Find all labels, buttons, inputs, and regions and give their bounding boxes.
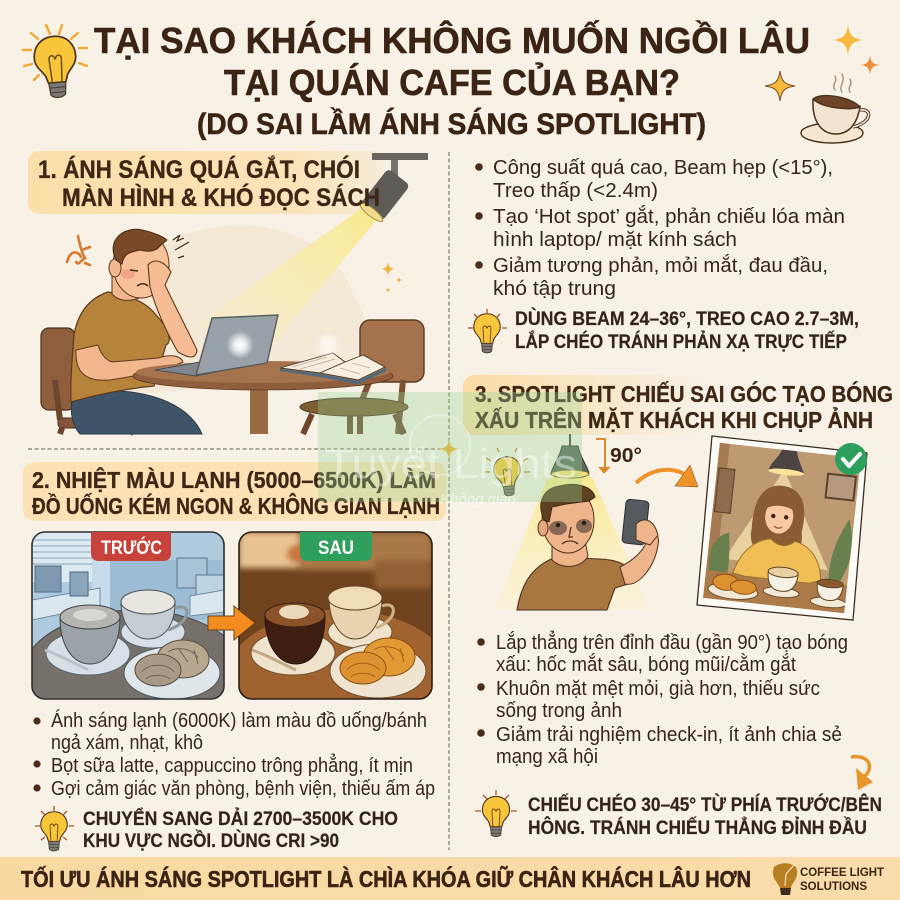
bullets: section 3: Giảm trải nghiệm check-in, ít ảnh chia sẻ (496, 724, 842, 746)
bullets: section 3: Lắp thẳng trên đỉnh đầu (gần 90°) tạo bóng (496, 630, 848, 654)
before picture: cold light (31, 531, 225, 700)
angle mark 90 degrees (596, 439, 642, 473)
right chair (300, 320, 424, 434)
heading pill 3: XẤU TRÊN MẶT KHÁCH KHI CHỤP ẢNH (475, 405, 873, 433)
bullets: section 3 (477, 630, 848, 768)
bullets: section 1 (475, 157, 845, 300)
heading pill 2 (23, 462, 446, 521)
light cone (495, 477, 650, 610)
watermark (318, 392, 582, 508)
icon: pendant lamp (551, 434, 589, 478)
heading pill 3 (463, 375, 893, 435)
sparkle on divider (439, 439, 459, 459)
bullets: section 2: Gợi cảm giác văn phòng, bệnh viện, thiếu ấm áp (51, 778, 435, 800)
sparkles (381, 262, 402, 293)
tip: section 3 (475, 790, 882, 839)
tip: section 2: CHUYỂN SANG DẢI 2700–3500K CHO (83, 808, 398, 830)
left chair (41, 328, 138, 434)
divider: horizontal (28, 448, 448, 450)
icon: coffee cup (801, 74, 869, 143)
title: (DO SAI LẦM ÁNH SÁNG SPOTLIGHT) (197, 107, 706, 141)
bullets: section 3: xấu: hốc mắt sâu, bóng mũi/cằm gắt (496, 653, 796, 676)
arrow: before to after (208, 606, 255, 640)
bullets: section 3: sống trong ảnh (496, 700, 622, 722)
panel: section 3 (463, 375, 893, 839)
laptop with glare (155, 315, 278, 376)
badge: after: SAU (318, 538, 354, 559)
tip: section 3: HÔNG. TRÁNH CHIẾU THẲNG ĐỈNH ĐẦU (528, 817, 867, 839)
divider: vertical (448, 152, 450, 850)
icon: pain squiggle (67, 236, 90, 265)
tip: section 2: KHU VỰC NGỒI. DÙNG CRI >90 (83, 830, 339, 852)
heading pill 2: ĐỒ UỐNG KÉM NGON & KHÔNG GIAN LẠNH (32, 492, 440, 519)
icon: tip bulb (484, 448, 530, 497)
heading pill 1 (28, 151, 383, 214)
watermark: Không gian (440, 491, 516, 508)
bullets: section 2 (33, 709, 435, 800)
bullets: section 1: khó tập trung (493, 278, 616, 300)
open book (280, 331, 386, 384)
tip: section 1: DÙNG BEAM 24–36°, TREO CAO 2.7–3M, (515, 308, 859, 330)
footer banner (0, 857, 900, 900)
man taking selfie (517, 484, 658, 610)
tip: section 2 (35, 806, 398, 852)
badge: before: TRƯỚC (101, 537, 162, 559)
heading pill 2: 2. NHIỆT MÀU LẠNH (5000–6500K) LÀM (32, 466, 436, 493)
badge: after (300, 532, 372, 561)
bullets: section 1: Công suất quá cao, Beam hẹp (<15°), (493, 157, 833, 179)
bullets: section 1: Treo thấp (<2.4m) (493, 180, 658, 202)
logo: SOLUTIONS (800, 879, 867, 893)
bullets: section 1: Tạo ‘Hot spot’ gắt, phản chiếu lóa màn (493, 205, 845, 228)
title (94, 19, 810, 141)
icon: track spotlight (358, 153, 428, 224)
heading 1: MÀN HÌNH & KHÓ ĐỌC SÁCH (62, 182, 380, 212)
bullets: section 2: Ánh sáng lạnh (6000K) làm màu đồ uống/bánh (51, 709, 427, 732)
bullets: section 3: Khuôn mặt mệt mỏi, già hơn, thiếu sức (496, 678, 820, 700)
bullets: section 3: mạng xã hội (496, 746, 598, 768)
logo: COFFEE LIGHT (800, 865, 885, 879)
background glow shape (60, 225, 370, 400)
bullets: section 1: Giảm tương phản, mỏi mắt, đau đầu, (493, 254, 828, 277)
table (133, 361, 393, 434)
tip: section 1: LẮP CHÉO TRÁNH PHẢN XẠ TRỰC TIẾP (515, 331, 847, 353)
icon: sparkles (765, 25, 880, 101)
photo: correct lighting (697, 436, 867, 620)
heading 1 (38, 154, 380, 212)
bullets: section 1: hình laptop/ mặt kính sách (493, 229, 737, 251)
footer banner: TỐI ƯU ÁNH SÁNG SPOTLIGHT LÀ CHÌA KHÓA GIỮ CHÂN KHÁCH LÂU HƠN (21, 865, 751, 892)
badge: before (91, 532, 171, 561)
panel: section 1 (28, 151, 428, 434)
panel: section 1 notes (468, 157, 859, 353)
badge: check mark (835, 443, 867, 475)
panel: section 2 (20, 462, 458, 852)
arrow: to photo (636, 465, 698, 487)
arrow: down to tip (851, 757, 873, 790)
bullets: section 2: Bọt sữa latte, cappuccino trông phẳng, ít mịn (51, 753, 413, 777)
after picture: warm light (238, 531, 433, 700)
man with headache (71, 229, 202, 434)
light beam (196, 208, 378, 345)
bullets: section 2: ngả xám, nhạt, khô (51, 732, 203, 754)
logo (773, 863, 885, 895)
angle mark 90 degrees: 90° (610, 445, 642, 467)
icon: title light bulb (23, 25, 87, 99)
title: TẠI SAO KHÁCH KHÔNG MUỐN NGỒI LÂU (94, 19, 810, 61)
watermark: Tuyết Lights (325, 440, 577, 487)
heading 1: 1. ÁNH SÁNG QUÁ GẮT, CHÓI (38, 154, 360, 184)
tip: section 1 (468, 308, 859, 353)
title: TẠI QUÁN CAFE CỦA BẠN? (224, 61, 680, 103)
